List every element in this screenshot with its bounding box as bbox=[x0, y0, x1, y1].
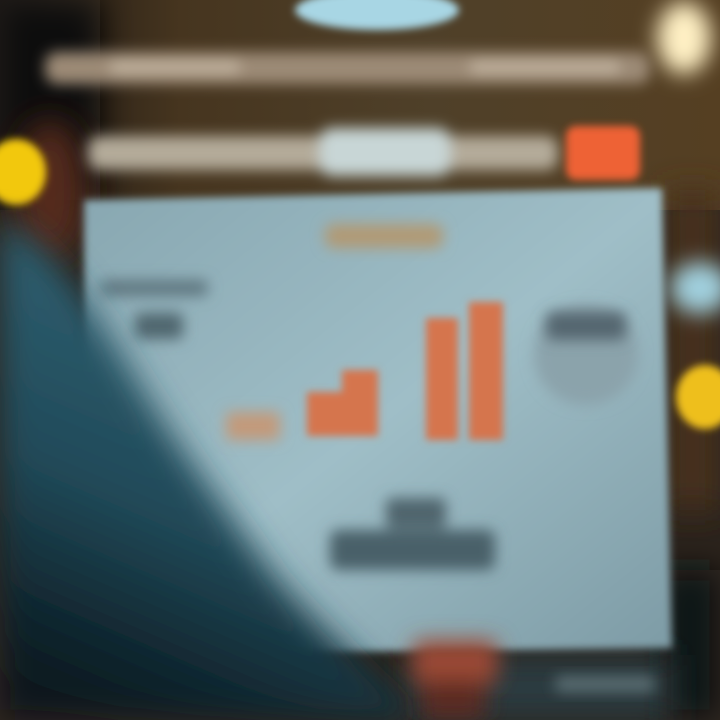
dark area and hair at top left bbox=[0, 0, 100, 260]
panel: presentation board bbox=[84, 188, 672, 655]
light: right blue glow bbox=[670, 262, 720, 314]
light: top centre glow bbox=[295, 0, 459, 30]
left text block bbox=[100, 280, 208, 339]
hand: lower centre bbox=[412, 640, 498, 720]
bar group: small bbox=[226, 412, 280, 440]
board heading bbox=[325, 224, 443, 248]
caption: bottom right bbox=[555, 676, 655, 692]
person: foreground silhouette bbox=[0, 222, 425, 720]
highlight: orange title badge bbox=[566, 126, 640, 180]
heading: second title line bbox=[88, 128, 558, 176]
chart: gauge with number bbox=[534, 305, 638, 405]
light: right yellow lamp bbox=[676, 365, 720, 429]
bar chart bbox=[226, 302, 503, 440]
bar group: tall bbox=[426, 302, 503, 440]
heading: first title line bbox=[45, 52, 650, 84]
bottom text block bbox=[330, 498, 495, 570]
bar group: medium bbox=[307, 370, 378, 436]
light: top right warm lamp bbox=[657, 2, 711, 74]
light: left yellow lamp bbox=[0, 139, 46, 205]
